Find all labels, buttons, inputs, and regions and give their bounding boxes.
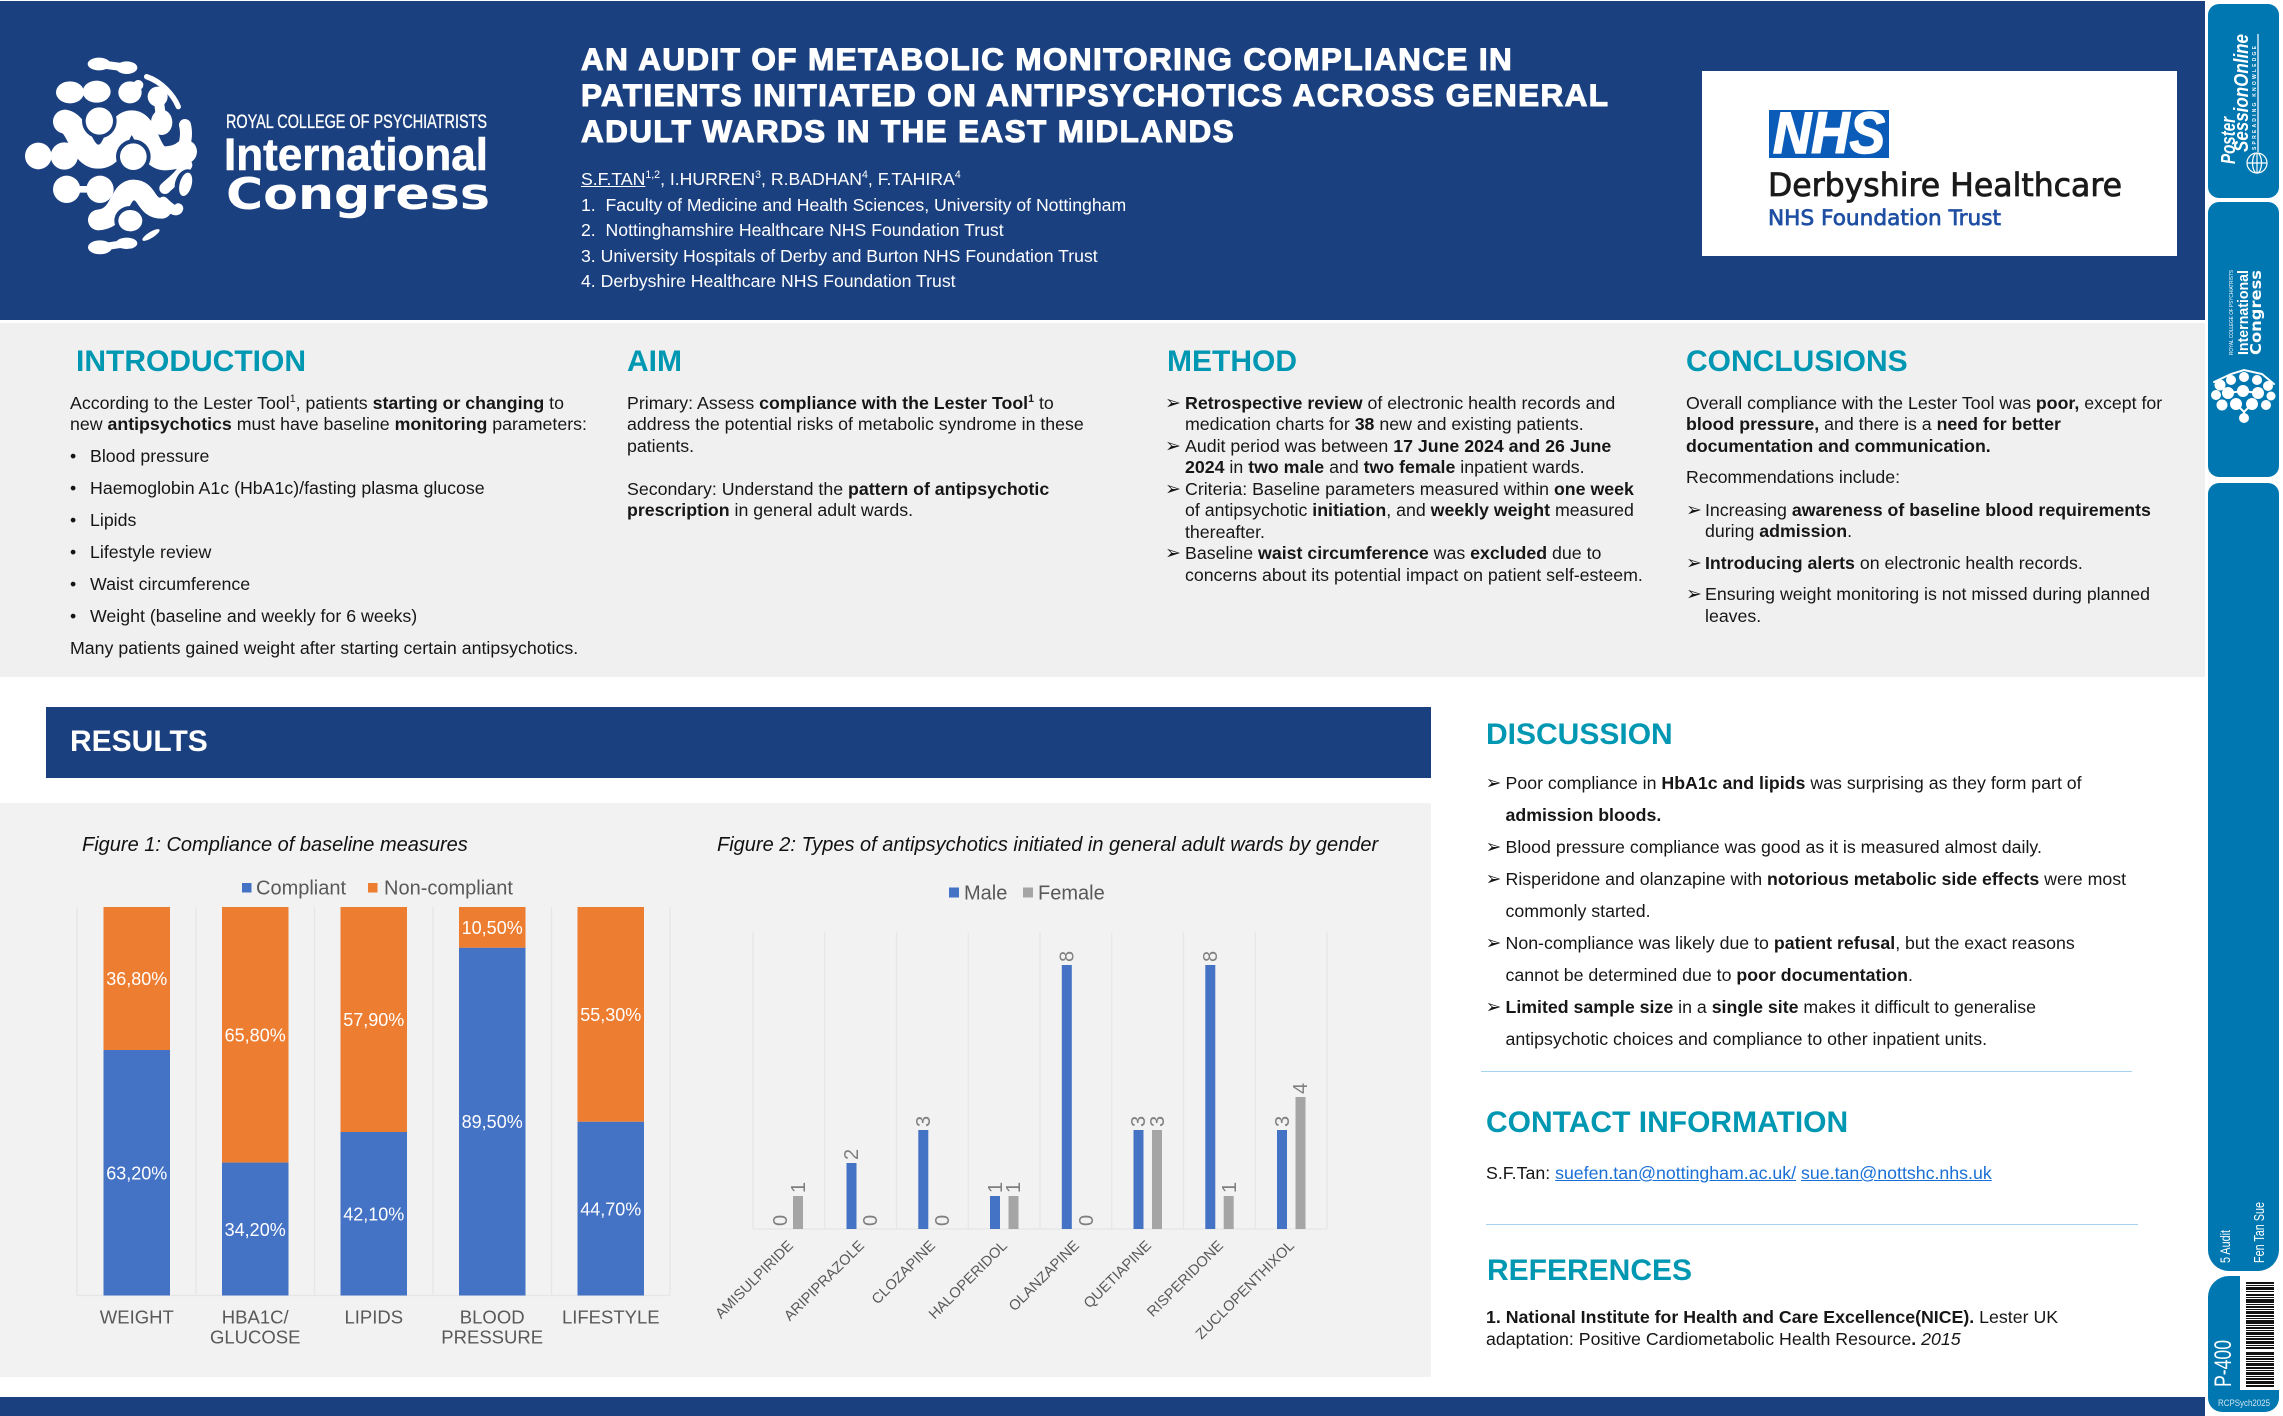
data labels: 10,50% bbox=[462, 918, 523, 938]
logo organisation name: Derbyshire Healthcare bbox=[1768, 166, 2122, 204]
data labels: 55,30% bbox=[580, 1005, 641, 1025]
heading: references: REFERENCES bbox=[1487, 1254, 1692, 1286]
title: AN AUDIT OF METABOLIC MONITORING COMPLIANCE IN bbox=[581, 41, 1513, 77]
chart: figure 1 stacked bars bbox=[76, 878, 670, 1348]
category labels: ZUCLOPENTHIXOL bbox=[1193, 1238, 1298, 1343]
text: introduction: Waist circumference bbox=[90, 574, 250, 594]
logo: Royal College of Psychiatrists International Congress bbox=[25, 58, 490, 254]
text: aim bbox=[627, 392, 1084, 520]
text: ➢ bbox=[1486, 996, 1501, 1018]
text: method: concerns about its potential impact on patient self-esteem. bbox=[1185, 564, 1643, 584]
text: aim: address the potential risks of metabolic syndrome in these bbox=[627, 414, 1084, 434]
text: discussion: Blood pressure compliance was good as it is measured almost daily. bbox=[1506, 837, 2042, 857]
conference tag: RCPSych2025 bbox=[2218, 1398, 2270, 1409]
logo wordmark: Congress bbox=[226, 169, 490, 220]
category labels: AMISULPIRIDE bbox=[713, 1238, 797, 1322]
panel: results charts background bbox=[0, 803, 1431, 1377]
figure 1 title: Figure 1: Compliance of baseline measures bbox=[82, 834, 468, 856]
text: discussion: admission bloods. bbox=[1506, 805, 1661, 825]
text: method: Audit period was between 17 June 2024 and 26 June bbox=[1185, 436, 1611, 456]
category labels bbox=[100, 1306, 660, 1348]
text: introduction: Lifestyle review bbox=[90, 542, 211, 562]
text: method: Criteria: Baseline parameters measured within one week bbox=[1185, 478, 1634, 498]
legend: Male bbox=[964, 882, 1007, 904]
category labels: GLUCOSE bbox=[210, 1326, 300, 1348]
text: method: of antipsychotic initiation, and weekly weight measured bbox=[1185, 500, 1634, 520]
sidebar logo wordmark: ROYAL COLLEGE OF PSYCHIATRISTS bbox=[2229, 270, 2235, 355]
sidebar wordmark: SessionOnline bbox=[2231, 34, 2253, 152]
heading: discussion: DISCUSSION bbox=[1486, 718, 1673, 751]
data labels: 0 bbox=[860, 1215, 882, 1226]
text: discussion: Limited sample size in a single site makes it difficult to generalise bbox=[1506, 997, 2036, 1017]
authors and affiliations: S.F.TAN1,2, I.HURREN3, R.BADHAN4, F.TAHIRA4 bbox=[581, 169, 961, 189]
category labels: RISPERIDONE bbox=[1144, 1238, 1227, 1320]
panel: top grey section bbox=[0, 323, 2205, 677]
category labels bbox=[713, 1238, 1298, 1343]
data labels: 1 bbox=[1219, 1182, 1241, 1193]
text: ➢ bbox=[1165, 478, 1181, 500]
text: reference bbox=[1486, 1307, 2058, 1348]
text: conclusions: blood pressure, and there is a need for better bbox=[1686, 414, 2061, 434]
data labels: 34,20% bbox=[225, 1220, 286, 1240]
text: ➢ bbox=[1486, 932, 1501, 954]
category labels: QUETIAPINE bbox=[1081, 1238, 1155, 1312]
text: method: 2024 in two male and two female inpatient wards. bbox=[1185, 457, 1585, 477]
text: introduction: • bbox=[70, 606, 76, 626]
data labels: 65,80% bbox=[225, 1026, 286, 1046]
data labels: 1 bbox=[788, 1182, 810, 1193]
authors and affiliations bbox=[581, 169, 1126, 291]
legend bbox=[242, 878, 513, 900]
text: conclusions: leaves. bbox=[1705, 606, 1761, 626]
logo wordmark bbox=[224, 112, 490, 220]
category labels: ARIPIPRAZOLE bbox=[781, 1238, 868, 1324]
icon: NHS lozenge: NHS bbox=[1773, 101, 1885, 166]
data labels: 36,80% bbox=[106, 969, 167, 989]
data labels: 63,20% bbox=[106, 1164, 167, 1184]
heading band: results: RESULTS bbox=[70, 725, 208, 758]
text: conclusions: Increasing awareness of baseline blood requirements bbox=[1705, 500, 2151, 520]
data labels: 3 bbox=[1128, 1116, 1150, 1127]
logo organisation name: NHS Foundation Trust bbox=[1768, 206, 2001, 230]
category labels: BLOOD bbox=[460, 1306, 525, 1328]
data labels: 44,70% bbox=[580, 1200, 641, 1220]
category labels: LIFESTYLE bbox=[562, 1306, 660, 1328]
text: aim: Primary: Assess compliance with the Lester Tool1 to bbox=[627, 392, 1054, 412]
data labels: 3 bbox=[1272, 1116, 1294, 1127]
text: discussion: Non-compliance was likely due to patient refusal, but the exact reasons bbox=[1506, 933, 2075, 953]
data labels: 0 bbox=[770, 1215, 792, 1226]
text: discussion: commonly started. bbox=[1506, 901, 1651, 921]
data labels: 3 bbox=[913, 1116, 935, 1127]
data labels: 89,50% bbox=[462, 1112, 523, 1132]
text: introduction: • bbox=[70, 478, 76, 498]
text: discussion: antipsychotic choices and compliance to other inpatient units. bbox=[1506, 1029, 1987, 1049]
heading: contact information: CONTACT INFORMATION bbox=[1486, 1106, 1848, 1138]
text: method: medication charts for 38 new and existing patients. bbox=[1185, 414, 1584, 434]
icon: globe bbox=[2247, 34, 2267, 173]
icon: brain dome bbox=[2212, 370, 2274, 422]
text: reference: adaptation: Positive Cardiometabolic Health Resource. 2015 bbox=[1486, 1328, 1961, 1348]
data labels: 2 bbox=[841, 1149, 863, 1160]
sidebar logo wordmark: Congress bbox=[2247, 270, 2265, 355]
text: conclusions: during admission. bbox=[1705, 521, 1852, 541]
logo wordmark: International bbox=[224, 129, 488, 180]
data labels: 0 bbox=[1076, 1215, 1098, 1226]
text: discussion: cannot be determined due to poor documentation. bbox=[1506, 965, 1913, 985]
authors and affiliations: 4. Derbyshire Healthcare NHS Foundation Trust bbox=[581, 271, 956, 291]
text: aim: prescription in general adult wards. bbox=[627, 500, 913, 520]
text: introduction: • bbox=[70, 574, 76, 594]
bar: blood pressure bbox=[459, 907, 526, 1296]
text: ➢ bbox=[1165, 392, 1181, 414]
text: ➢ bbox=[1486, 868, 1501, 890]
category labels: LIPIDS bbox=[344, 1306, 403, 1328]
category labels: PRESSURE bbox=[441, 1326, 543, 1348]
text: reference: 1. National Institute for Health and Care Excellence(NICE). Lester UK bbox=[1486, 1307, 2058, 1327]
data labels: 57,90% bbox=[343, 1010, 404, 1030]
authors and affiliations: 2. Nottinghamshire Healthcare NHS Foundation Trust bbox=[581, 220, 1004, 240]
text: introduction: Blood pressure bbox=[90, 446, 209, 466]
logo organisation name bbox=[1768, 166, 2122, 230]
authors and affiliations: 3. University Hospitals of Derby and Burton NHS Foundation Trust bbox=[581, 246, 1098, 266]
legend: Compliant bbox=[256, 878, 346, 900]
text: conclusions: documentation and communication. bbox=[1686, 436, 1991, 456]
heading: conclusions: CONCLUSIONS bbox=[1686, 345, 1908, 378]
sidebar logo wordmark: International bbox=[2235, 270, 2252, 355]
header band bbox=[0, 1, 2205, 320]
heading band: results bbox=[46, 707, 1431, 778]
category and author text: 5 Audit bbox=[2217, 1230, 2233, 1263]
sidebar wordmark bbox=[2218, 34, 2258, 164]
category and author text bbox=[2217, 1202, 2268, 1263]
text: aim: Secondary: Understand the pattern of antipsychotic bbox=[627, 478, 1049, 498]
text: method: thereafter. bbox=[1185, 522, 1265, 542]
data labels: 4 bbox=[1290, 1083, 1312, 1094]
heading: aim: AIM bbox=[627, 345, 682, 378]
male bars bbox=[846, 965, 1287, 1229]
text: conclusions: Introducing alerts on electronic health records. bbox=[1705, 552, 2083, 572]
text: introduction: Weight (baseline and weekly for 6 weeks) bbox=[90, 606, 417, 626]
text: introduction bbox=[70, 392, 587, 658]
text: method: Retrospective review of electronic health records and bbox=[1185, 392, 1615, 412]
data labels: 1 bbox=[1003, 1182, 1025, 1193]
bar: HbA1c/glucose bbox=[222, 907, 288, 1296]
text: conclusions: ➢ bbox=[1686, 583, 1702, 605]
text: method: Baseline waist circumference was excluded due to bbox=[1185, 543, 1601, 563]
category labels: HALOPERIDOL bbox=[926, 1238, 1011, 1323]
title: ADULT WARDS IN THE EAST MIDLANDS bbox=[581, 113, 1235, 149]
category labels: CLOZAPINE bbox=[869, 1238, 939, 1308]
sidebar logo wordmark bbox=[2229, 270, 2265, 355]
sidebar tab: poster session online bbox=[2208, 4, 2279, 198]
text: introduction: Lipids bbox=[90, 510, 136, 530]
text: introduction: Haemoglobin A1c (HbA1c)/fasting plasma glucose bbox=[90, 478, 485, 498]
heading: method: METHOD bbox=[1167, 345, 1297, 378]
sidebar tab: category and author bbox=[2208, 483, 2279, 1271]
data labels: 3 bbox=[1147, 1116, 1169, 1127]
text: ➢ bbox=[1165, 434, 1181, 456]
text: discussion: Poor compliance in HbA1c and lipids was surprising as they form part of bbox=[1506, 773, 2082, 793]
data labels bbox=[770, 951, 1312, 1226]
sidebar tab: international congress bbox=[2208, 202, 2279, 477]
data labels: 8 bbox=[1056, 951, 1078, 962]
text: conclusions bbox=[1686, 392, 2162, 626]
icon: brain network bbox=[25, 58, 200, 254]
legend bbox=[949, 882, 1105, 904]
text: introduction: • bbox=[70, 446, 76, 466]
title bbox=[581, 41, 1609, 149]
text: ➢ bbox=[1486, 836, 1501, 858]
bar: weight bbox=[104, 907, 170, 1296]
authors and affiliations: 1. Faculty of Medicine and Health Sciences, University of Nottingham bbox=[581, 195, 1126, 215]
legend: Female bbox=[1038, 882, 1105, 904]
text: conclusions: ➢ bbox=[1686, 498, 1702, 520]
sidebar wordmark: Poster bbox=[2218, 116, 2240, 164]
barcode bbox=[2246, 1282, 2274, 1387]
data labels: 42,10% bbox=[343, 1204, 404, 1224]
bar: lifestyle bbox=[578, 907, 644, 1296]
data labels: 0 bbox=[932, 1215, 954, 1226]
text: contact details: S.F.Tan: suefen.tan@nottingham.ac.uk/ sue.tan@nottshc.nhs.uk bbox=[1486, 1163, 1992, 1183]
text: aim: patients. bbox=[627, 436, 694, 456]
category labels: OLANZAPINE bbox=[1006, 1238, 1083, 1315]
text: method bbox=[1165, 392, 1643, 584]
category labels: HBA1C/ bbox=[222, 1306, 289, 1328]
footer band bbox=[0, 1397, 2205, 1416]
legend: Non-compliant bbox=[384, 878, 513, 900]
heading: introduction: INTRODUCTION bbox=[76, 345, 306, 378]
text: discussion bbox=[1486, 772, 2126, 1049]
sidebar tab: poster number and barcode bbox=[2208, 1276, 2279, 1412]
text: discussion: Risperidone and olanzapine with notorious metabolic side effects were most bbox=[1506, 869, 2126, 889]
text: conclusions: ➢ bbox=[1686, 552, 1702, 574]
category labels: WEIGHT bbox=[100, 1306, 174, 1328]
data labels bbox=[106, 918, 641, 1240]
figure 2 title: Figure 2: Types of antipsychotics initiated in general adult wards by gender bbox=[717, 834, 1378, 856]
text: conclusions: Ensuring weight monitoring is not missed during planned bbox=[1705, 584, 2150, 604]
text: introduction: According to the Lester Tool1, patients starting or changing to bbox=[70, 392, 564, 412]
category and author text: Fen Tan Sue bbox=[2251, 1202, 2268, 1263]
title: PATIENTS INITIATED ON ANTIPSYCHOTICS ACROSS GENERAL bbox=[581, 77, 1609, 113]
poster number: P-400 bbox=[2210, 1340, 2237, 1387]
text: introduction: • bbox=[70, 510, 76, 530]
data labels: 1 bbox=[985, 1182, 1007, 1193]
text: conclusions: Overall compliance with the Lester Tool was poor, except for bbox=[1686, 392, 2162, 412]
text: ➢ bbox=[1486, 772, 1501, 794]
data labels: 8 bbox=[1200, 951, 1222, 962]
text: introduction: new antipsychotics must have baseline monitoring parameters: bbox=[70, 414, 587, 434]
logo: NHS Derbyshire Healthcare bbox=[1702, 71, 2177, 256]
bar: lipids bbox=[340, 907, 407, 1296]
sidebar wordmark: SPREADING KNOWLEDGE bbox=[2252, 45, 2258, 150]
text: introduction: • bbox=[70, 542, 76, 562]
text: conclusions: Recommendations include: bbox=[1686, 467, 1900, 487]
text: introduction: Many patients gained weight after starting certain antipsychotics. bbox=[70, 638, 578, 658]
female bars bbox=[793, 1097, 1306, 1229]
text: ➢ bbox=[1165, 542, 1181, 564]
chart: figure 2 grouped bars bbox=[713, 882, 1328, 1343]
